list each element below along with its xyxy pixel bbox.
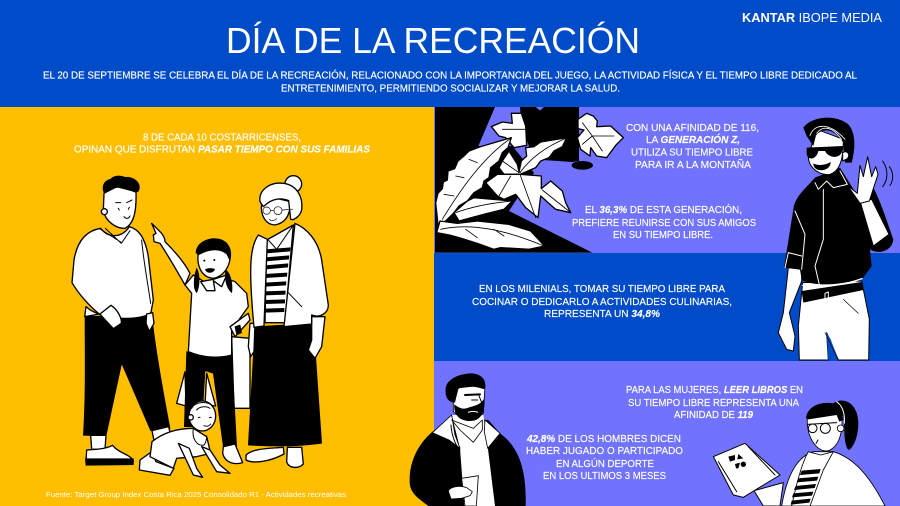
men sports text [526, 434, 683, 482]
intro text: EL 20 DE SEPTIEMBRE SE CELEBRA EL DÍA DE LA RECREACIÓN, RELACIONADO CON LA IMPORTANCIA DEL JUEGO, LA ACTIVIDAD FÍSICA Y EL TIEMPO LIBRE DEDICADO AL [43, 68, 857, 82]
panel: men and women [410, 118, 900, 506]
millennials text: COCINAR O DEDICARLO A ACTIVIDADES CULINARIAS, [472, 297, 732, 308]
women reading text [626, 385, 803, 421]
women reading text: AFINIDAD DE 119 [674, 410, 753, 421]
header panel [0, 0, 900, 107]
illustration: family [72, 176, 328, 477]
millennials text: EN LOS MILENIALS, TOMAR SU TIEMPO LIBRE PARA [479, 284, 725, 295]
Gen Z friends text: EN SU TIEMPO LIBRE. [613, 230, 713, 241]
Gen Z friends text: PREFIERE REUNIRSE CON SUS AMIGOS [572, 218, 756, 229]
Gen Z friends text [572, 203, 756, 241]
men sports text: EN LOS ULTIMOS 3 MESES [543, 471, 666, 482]
girl [152, 223, 250, 464]
panel: generation Z [434, 107, 900, 253]
father [72, 176, 171, 465]
family statistic text: 8 DE CADA 10 COSTARRICENSES, [143, 132, 301, 144]
illustration: plant [435, 107, 623, 253]
family statistic text: OPINAN QUE DISFRUTAN PASAR TIEMPO CON SUS FAMILIAS [74, 144, 370, 156]
intro text: ENTRETENIMIENTO, PERMITIENDO SOCIALIZAR Y MEJORAR LA SALUD. [281, 84, 620, 94]
leaves [436, 113, 623, 249]
women reading text: SU TIEMPO LIBRE REPRESENTA UNA [628, 398, 799, 409]
illustration: man waving [778, 118, 893, 360]
millennials text: REPRESENTA UN 34,8% [544, 309, 660, 320]
Gen Z affinity text: UTILIZA SU TIEMPO LIBRE [631, 148, 753, 158]
Gen Z friends text: EL 36,3% DE ESTA GENERACIÓN, [585, 203, 742, 216]
title: DÍA DE LA RECREACIÓN [226, 20, 640, 61]
baby [139, 401, 230, 477]
illustration: woman with book [713, 401, 885, 506]
book [713, 443, 783, 506]
grandmother [246, 176, 328, 467]
men sports text: HABER JUGADO O PARTICIPADO [526, 446, 683, 457]
Gen Z affinity text: PARA IR A LA MONTAÑA [635, 158, 751, 171]
panel: family [0, 107, 434, 506]
Gen Z affinity text: LA GENERACIÓN Z, [646, 133, 740, 146]
logo: Kantar Ibope Media: KANTAR IBOPE MEDIA [742, 10, 882, 25]
Gen Z affinity text: CON UNA AFINIDAD DE 116, [626, 123, 759, 134]
men sports text: 42,8% DE LOS HOMBRES DICEN [526, 434, 681, 445]
coffee cup [448, 476, 478, 506]
millennials text [472, 284, 732, 320]
men sports text: EN ALGÚN DEPORTE [556, 457, 654, 470]
panel: millennials [434, 253, 900, 360]
women reading text: PARA LAS MUJERES, LEER LIBROS EN [626, 385, 803, 396]
intro text [43, 68, 857, 94]
source note: Fuente: Target Group Index Costa Rica 2025 Consolidado R1 - Actividades recreativas [46, 492, 347, 499]
family statistic text [74, 132, 370, 156]
illustration: bearded man [410, 373, 526, 506]
Gen Z affinity text [626, 123, 759, 171]
